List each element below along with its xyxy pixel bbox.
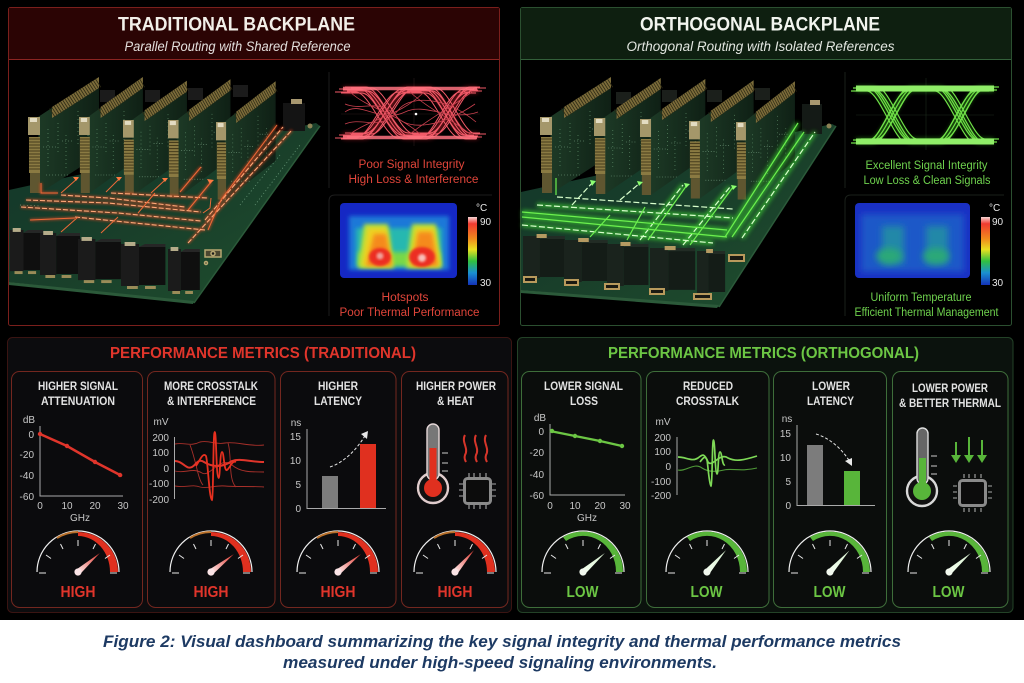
icon: chip xyxy=(459,473,496,509)
line chart: signal loss: -20 xyxy=(530,448,544,459)
mounting pads xyxy=(204,250,221,264)
card: reduced crosstalk: REDUCED xyxy=(683,381,733,393)
card: higher power and heat: & HEAT xyxy=(437,396,474,408)
card: lower latency xyxy=(774,372,886,608)
line chart: attenuation: 0 xyxy=(37,501,43,512)
caption: hotspots xyxy=(340,292,480,319)
card: lower power better thermal: LOWER POWER xyxy=(912,383,989,395)
figure caption xyxy=(103,632,901,672)
heading: performance metrics traditional: PERFORMANCE METRICS (TRADITIONAL) xyxy=(110,345,416,362)
card: lower power better thermal xyxy=(892,372,1008,608)
traces xyxy=(522,132,815,245)
label: high: HIGH xyxy=(320,584,356,601)
caption: poor signal integrity: Poor Signal Integrity xyxy=(358,159,465,171)
line chart: signal loss: 10 xyxy=(569,501,581,512)
gauge: high xyxy=(170,531,252,577)
gauge: low xyxy=(908,531,990,577)
line chart: attenuation: -20 xyxy=(20,450,34,461)
colour scale: orthogonal xyxy=(981,203,1004,289)
icon: heat waves xyxy=(464,435,487,462)
line chart: signal loss: 30 xyxy=(619,501,631,512)
caption: excellent signal integrity: Low Loss & Clean Signals xyxy=(864,175,991,187)
card: reduced crosstalk: CROSSTALK xyxy=(676,396,740,408)
gauge: low xyxy=(789,531,871,577)
bar chart: lower latency: 5 xyxy=(785,477,791,488)
chart: thermal map with hotspots xyxy=(340,203,457,278)
header band: traditional xyxy=(9,8,499,59)
traces xyxy=(21,127,292,243)
waveform chart: crosstalk: 200 xyxy=(152,433,169,444)
memory cards xyxy=(540,77,611,193)
heading: performance metrics orthogonal: PERFORMANCE METRICS (ORTHOGONAL) xyxy=(608,345,919,362)
icon: hot thermometer xyxy=(418,424,448,503)
caption: hotspots: Poor Thermal Performance xyxy=(340,307,480,319)
bar chart: latency xyxy=(290,418,386,515)
waveform chart: reduced crosstalk: -100 xyxy=(651,477,671,488)
waveform chart: reduced crosstalk xyxy=(651,417,757,502)
bar chart: latency: 10 xyxy=(290,456,301,467)
line chart: attenuation: dB xyxy=(23,415,35,426)
card: higher latency: HIGHER xyxy=(318,381,359,393)
card: lower signal loss xyxy=(522,372,641,608)
caption: hotspots: Hotspots xyxy=(382,292,429,304)
title: traditional backplane: TRADITIONAL BACKPLANE xyxy=(118,14,355,36)
line chart: attenuation: -60 xyxy=(20,492,34,503)
card: higher signal attenuation: HIGHER SIGNAL xyxy=(38,381,118,393)
icon: chip xyxy=(953,474,992,512)
waveform chart: reduced crosstalk: 100 xyxy=(654,447,671,458)
card: higher latency xyxy=(280,372,396,608)
panel: performance metrics traditional xyxy=(8,338,512,612)
caption: poor signal integrity: High Loss & Interference xyxy=(348,174,478,186)
waveform chart: reduced crosstalk: 0 xyxy=(665,462,671,473)
caption: uniform temperature: Efficient Thermal Management xyxy=(854,307,999,319)
panel: performance metrics orthogonal xyxy=(518,338,1013,612)
icon: cooling arrows xyxy=(951,437,987,463)
figure caption: measured under high-speed signaling environments. xyxy=(283,653,717,672)
card: higher power and heat: HIGHER POWER xyxy=(416,381,497,393)
card: lower power better thermal: & BETTER THERMAL xyxy=(899,398,1001,410)
line chart: attenuation xyxy=(20,415,129,524)
card: higher power and heat xyxy=(402,372,508,608)
subtitle: orthogonal: Orthogonal Routing with Isolated References xyxy=(626,39,895,54)
gauge: low xyxy=(542,531,624,577)
bar chart: latency: 0 xyxy=(295,504,301,515)
caption: poor signal integrity xyxy=(348,159,478,186)
title: orthogonal backplane: ORTHOGONAL BACKPLANE xyxy=(640,14,880,36)
caption: uniform temperature xyxy=(854,292,999,319)
waveform chart: crosstalk: 100 xyxy=(152,448,169,459)
memory cards xyxy=(28,77,99,193)
waveform chart: crosstalk: mV xyxy=(154,417,169,428)
front connector blocks xyxy=(523,234,565,278)
line chart: attenuation: 0 xyxy=(28,430,34,441)
line chart: signal loss: 0 xyxy=(547,501,553,512)
line chart: signal loss: -40 xyxy=(530,470,544,481)
gauge: low xyxy=(666,531,748,577)
label: high: HIGH xyxy=(438,584,472,601)
bar chart: lower latency: ns xyxy=(782,414,792,425)
waveform chart: crosstalk: -100 xyxy=(149,479,169,490)
panel outline: thermal xyxy=(329,195,492,316)
mounting pads xyxy=(524,255,744,299)
line chart: signal loss: 20 xyxy=(594,501,606,512)
bar chart: latency: 5 xyxy=(295,480,301,491)
card: lower latency: LATENCY xyxy=(807,396,854,408)
card: reduced crosstalk xyxy=(646,372,769,608)
card: lower signal loss: LOSS xyxy=(570,396,598,408)
colour scale: orthogonal: °C xyxy=(989,203,1000,214)
line chart: attenuation: 30 xyxy=(117,501,129,512)
figure caption: Figure 2: Visual dashboard summarizing the key signal integrity and thermal performance metrics xyxy=(103,632,901,651)
waveform chart: reduced crosstalk: mV xyxy=(656,417,671,428)
caption: excellent signal integrity: Excellent Signal Integrity xyxy=(866,160,988,172)
waveform chart: crosstalk xyxy=(149,417,264,506)
card: higher signal attenuation xyxy=(12,372,142,608)
line chart: signal loss: GHz xyxy=(577,513,597,524)
illustration: orthogonal backplane board xyxy=(521,77,836,308)
caption: excellent signal integrity xyxy=(864,160,991,187)
icon: cool thermometer xyxy=(907,428,937,506)
header band: orthogonal xyxy=(521,8,1011,59)
back connectors xyxy=(616,88,770,104)
card: more crosstalk xyxy=(148,372,275,608)
panel: orthogonal backplane xyxy=(520,8,1012,326)
waveform chart: crosstalk: 0 xyxy=(163,464,169,475)
colour scale: orthogonal: 90 xyxy=(992,217,1004,228)
colour scale: traditional xyxy=(468,203,492,289)
line chart: signal loss: 0 xyxy=(538,427,544,438)
waveform chart: crosstalk: -200 xyxy=(149,495,169,506)
label: low: LOW xyxy=(814,584,846,601)
bar chart: latency: 15 xyxy=(290,432,301,443)
card: lower signal loss: LOWER SIGNAL xyxy=(544,381,623,393)
line chart: signal loss: -60 xyxy=(530,491,544,502)
gauge: high xyxy=(297,531,379,577)
card: higher signal attenuation: ATTENUATION xyxy=(41,396,115,408)
label: high: HIGH xyxy=(60,584,96,601)
front connector blocks xyxy=(10,228,43,274)
waveform chart: reduced crosstalk: 200 xyxy=(654,433,671,444)
traces glow xyxy=(21,125,292,243)
subtitle: traditional: Parallel Routing with Shared Reference xyxy=(124,39,350,54)
line chart: attenuation: 10 xyxy=(61,501,73,512)
card: lower latency: LOWER xyxy=(812,381,851,393)
panel outline: thermal xyxy=(845,195,1004,316)
label: high: HIGH xyxy=(194,584,228,601)
caption: uniform temperature: Uniform Temperature xyxy=(870,292,972,304)
colour scale: orthogonal: 30 xyxy=(992,278,1004,289)
line chart: signal loss: dB xyxy=(534,413,546,424)
card: more crosstalk: MORE CROSSTALK xyxy=(164,381,259,393)
waveform chart: reduced crosstalk: -200 xyxy=(651,491,671,502)
panel: traditional backplane xyxy=(8,8,500,326)
gauge: high xyxy=(414,531,496,577)
colour scale: traditional: 30 xyxy=(480,278,492,289)
chart: clean eye diagram xyxy=(845,72,999,188)
chart: noisy eye diagram xyxy=(329,72,486,188)
corner connector block xyxy=(283,99,305,131)
traces glow xyxy=(522,123,815,245)
bar chart: lower latency: 15 xyxy=(780,429,791,440)
line chart: attenuation: GHz xyxy=(70,513,90,524)
colour scale: traditional: 90 xyxy=(480,217,492,228)
bar chart: latency: ns xyxy=(291,418,301,429)
bar chart: lower latency: 10 xyxy=(780,453,791,464)
card: more crosstalk: & INTERFERENCE xyxy=(167,396,256,408)
illustration: traditional backplane board xyxy=(9,77,320,304)
label: low: LOW xyxy=(932,584,965,601)
line chart: attenuation: -40 xyxy=(20,471,34,482)
label: low: LOW xyxy=(690,584,723,601)
bar chart: lower latency xyxy=(780,414,875,512)
label: low: LOW xyxy=(566,584,599,601)
card: higher latency: LATENCY xyxy=(314,396,362,408)
bar chart: lower latency: 0 xyxy=(785,501,791,512)
chart: uniform thermal map xyxy=(855,203,970,278)
colour scale: traditional: °C xyxy=(476,203,487,214)
back connectors xyxy=(100,85,248,102)
line chart: attenuation: 20 xyxy=(89,501,101,512)
corner connector block xyxy=(802,100,822,134)
gauge: high xyxy=(37,531,119,577)
line chart: signal loss xyxy=(530,413,631,524)
